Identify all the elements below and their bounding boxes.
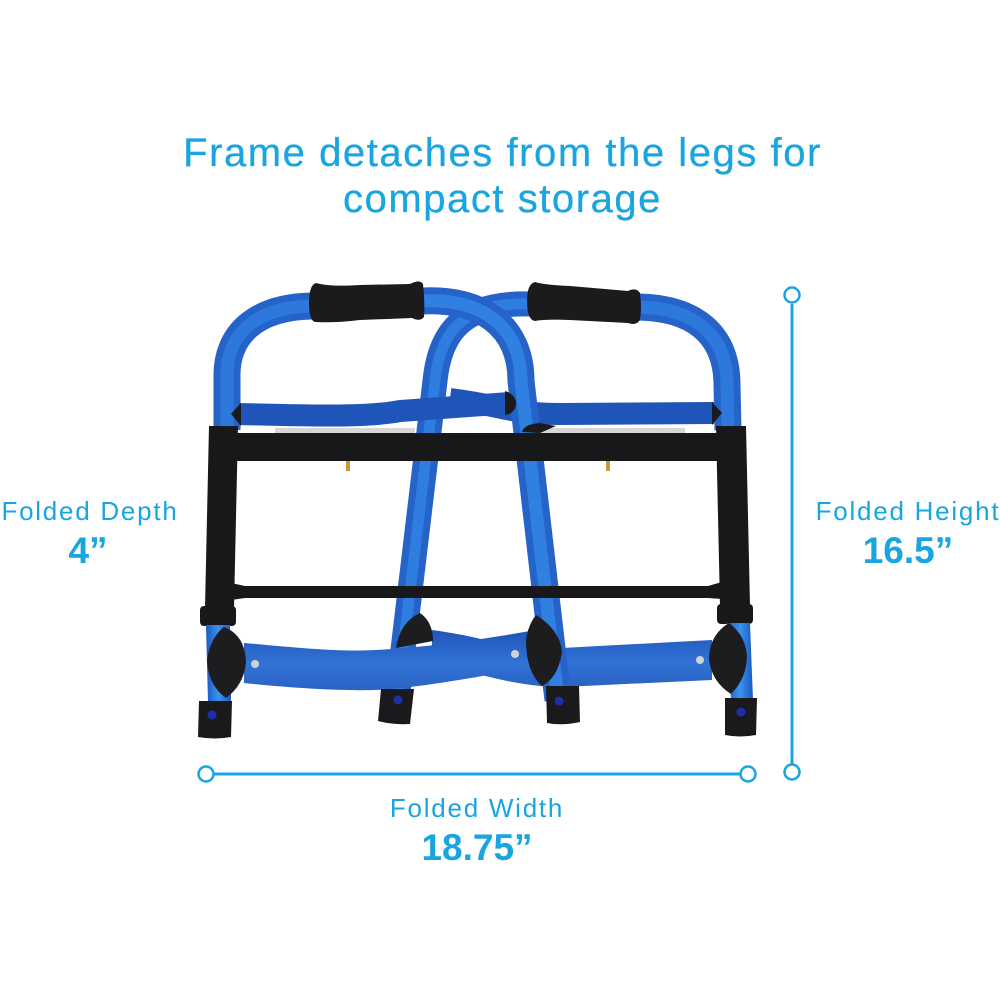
- folded depth label: [1, 496, 179, 571]
- folded height label: Folded Height: [816, 496, 1000, 526]
- back frame arch: [397, 304, 530, 700]
- crossbar end caps: [231, 391, 722, 433]
- folded width label: 18.75”: [421, 827, 533, 868]
- black frame: [200, 426, 753, 626]
- front lower bar: [244, 631, 530, 690]
- folded width label: Folded Width: [390, 793, 564, 823]
- rivets: [251, 650, 704, 668]
- title: compact storage: [343, 177, 662, 221]
- folded depth label: Folded Depth: [1, 496, 179, 526]
- back crossbar: [450, 399, 714, 414]
- foot bolts: [208, 696, 746, 720]
- rubber feet: [198, 686, 757, 738]
- joints: [207, 613, 747, 698]
- folded depth label: 4”: [68, 530, 108, 571]
- front frame arch: [422, 301, 558, 700]
- side uprights: [227, 306, 728, 430]
- folded height label: [816, 496, 1000, 571]
- folded height label: 16.5”: [863, 530, 953, 571]
- title: Frame detaches from the legs for: [183, 131, 822, 175]
- grips: [309, 282, 641, 324]
- front crossbar: [238, 403, 510, 416]
- back lower bar: [432, 630, 712, 687]
- folded width label: [390, 793, 564, 868]
- height dimension line: [783, 286, 801, 781]
- title: [183, 131, 822, 221]
- width dimension line: [197, 765, 757, 783]
- side legs: [206, 623, 753, 702]
- mounting plates and pins: [275, 428, 685, 471]
